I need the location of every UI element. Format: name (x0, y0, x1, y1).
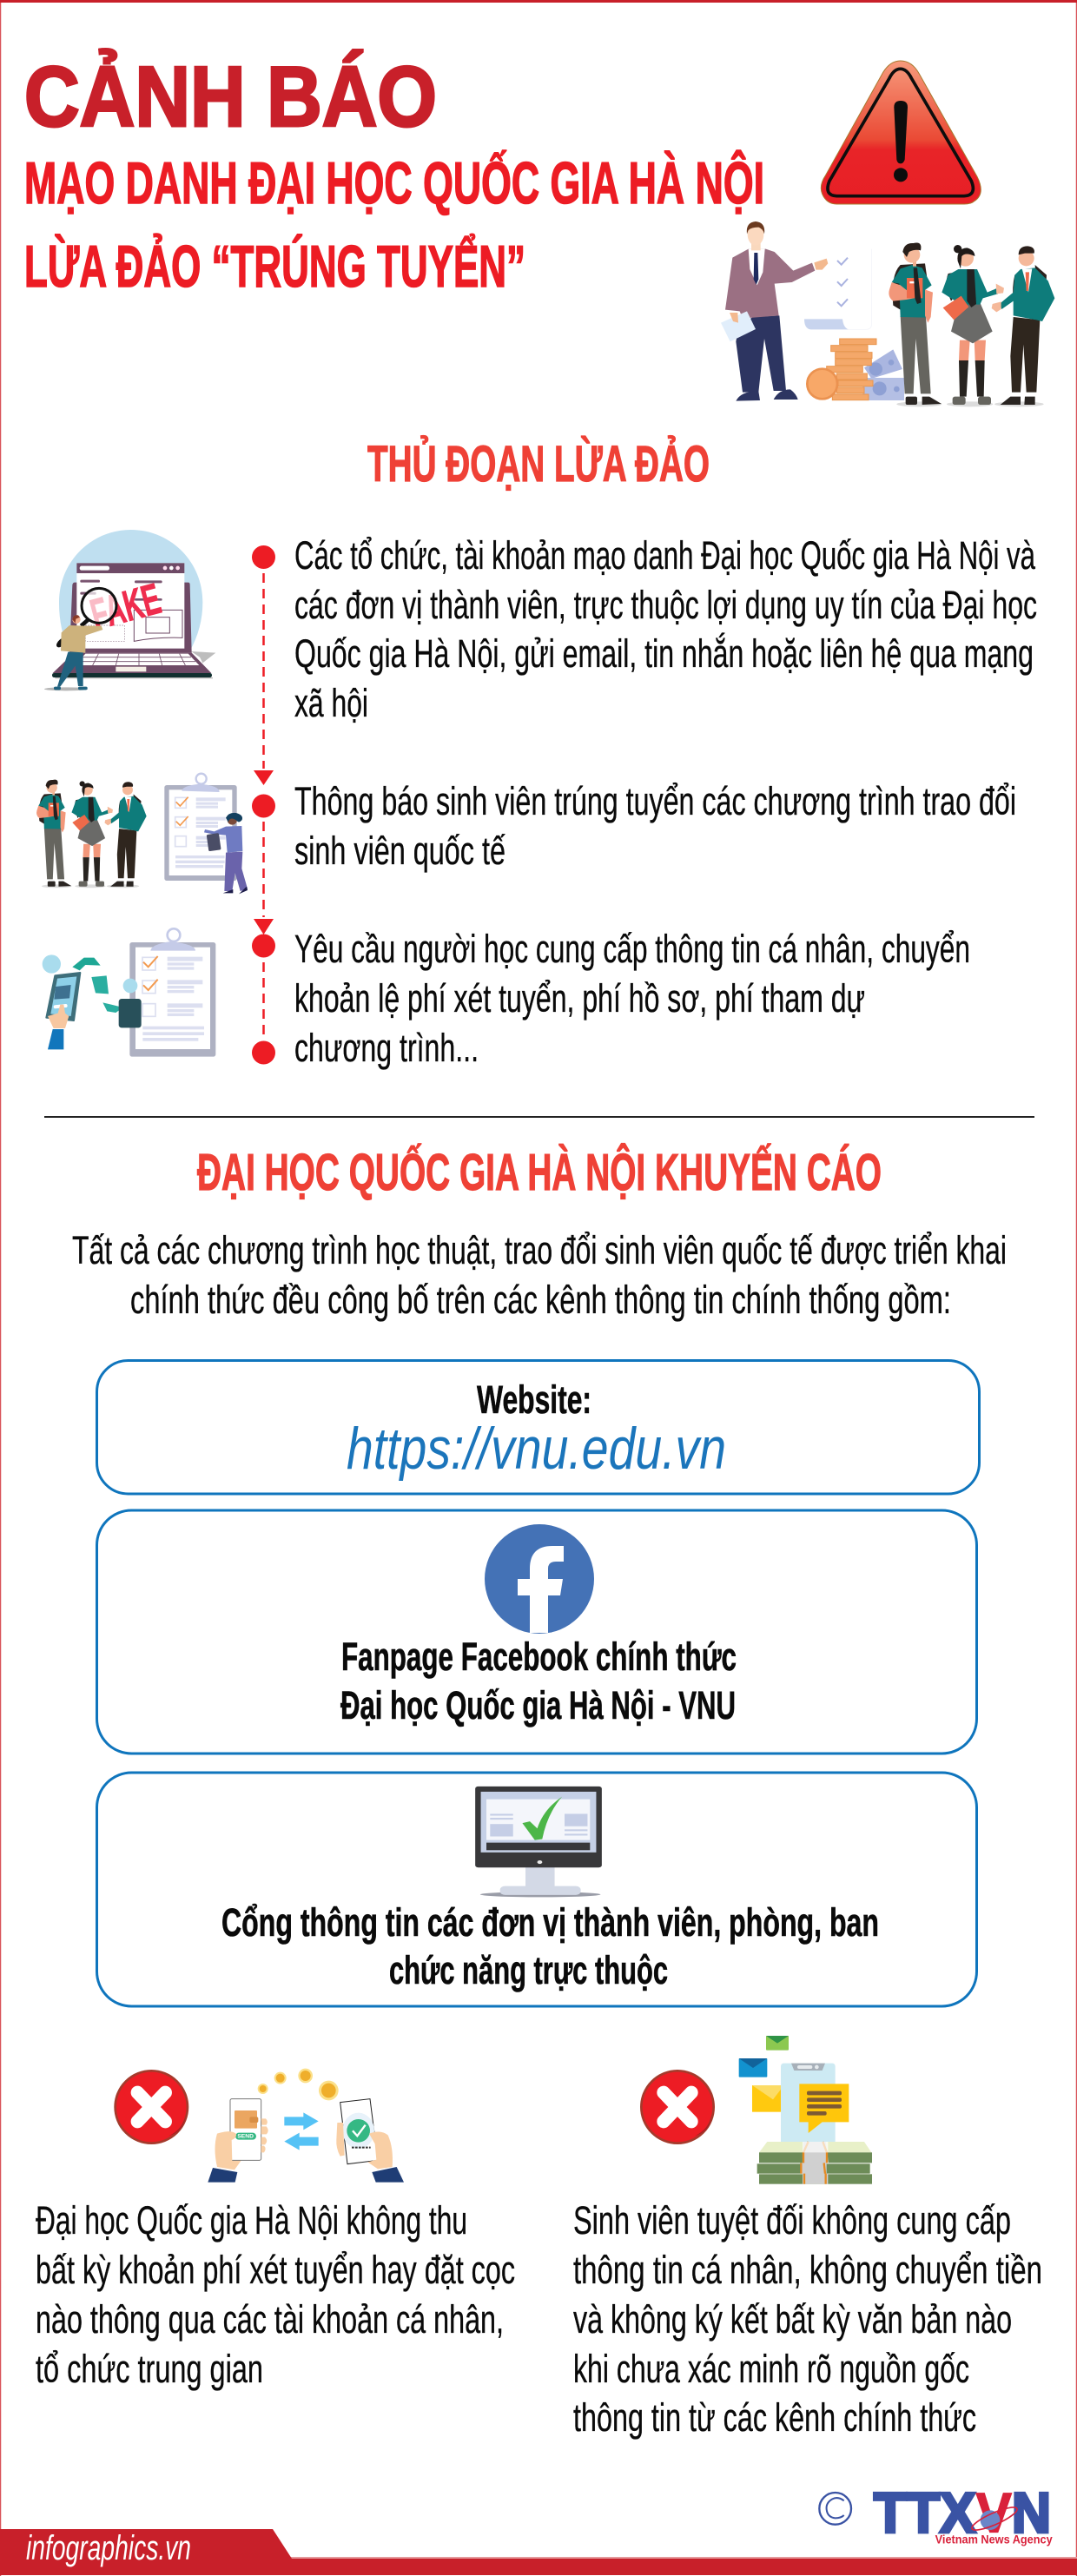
presenter (204, 813, 248, 894)
label: fanpage: Fanpage Facebook chính thức (341, 1635, 737, 1679)
illustration: teacher, checklist, money and students (721, 221, 1054, 406)
tagline: Vietnam News Agency (935, 2533, 1053, 2546)
title (24, 49, 764, 300)
timeline: bullets, dashed connectors, arrows (252, 545, 275, 1065)
link: website URL: https://vnu.edu.vn (347, 1416, 726, 1482)
icon: red cross left (116, 2071, 188, 2143)
illustration: phone payment and clipboard (43, 928, 215, 1057)
text block: trick 3 (294, 927, 970, 1070)
label: fanpage (340, 1635, 737, 1727)
three students (889, 242, 1054, 406)
envelopes (739, 2036, 789, 2112)
top red bar (0, 0, 1077, 3)
text block: left warning (36, 2198, 515, 2391)
text block: trick 1: xã hội (294, 681, 368, 725)
phone (781, 2064, 836, 2147)
chat bubble (799, 2084, 849, 2133)
phone and hand (46, 973, 80, 1049)
text block: left warning: nào thông qua các tài khoản cá nhân, (36, 2297, 504, 2342)
text block: trick 2: sinh viên quốc tế (294, 829, 505, 873)
label: portals (221, 1900, 879, 1992)
label: portals: chức năng trực thuộc (389, 1948, 668, 1992)
teacher (721, 221, 828, 401)
illustration: students (36, 780, 147, 888)
text block: left warning: tổ chức trung gian (36, 2347, 263, 2391)
FAKE stamp text: FAKE (85, 574, 166, 639)
heading: tricks: THỦ ĐOẠN LỪA ĐẢO (367, 436, 710, 492)
illustration: fake website on laptop (44, 530, 215, 690)
icon: red cross right (641, 2071, 714, 2143)
cash stack (757, 2142, 872, 2184)
coins (258, 2069, 339, 2100)
illustration: messages and cash (739, 2036, 872, 2184)
inspector figure (44, 615, 102, 690)
illustration: clipboard with presenter (164, 774, 248, 894)
text block: trick 1 (294, 533, 1037, 725)
footer band (0, 2529, 1077, 2575)
wordmark: TTXVN (874, 2480, 1051, 2544)
send label: SEND (237, 2135, 254, 2140)
panel: website (97, 1360, 980, 1494)
magnifying glass (81, 588, 116, 626)
icon: warning triangle (821, 61, 981, 204)
money stack (807, 339, 904, 400)
globe (969, 2503, 1020, 2534)
text block: left warning: Đại học Quốc gia Hà Nội không thu (36, 2198, 467, 2242)
label: website: Website: (477, 1377, 591, 1422)
panel: unit portals (97, 1773, 976, 2006)
text block: trick 3: khoản lệ phí xét tuyển, phí hồ sơ, phí tham dự (294, 976, 865, 1020)
icon: monitor with check (475, 1787, 602, 1897)
logo: TTXVN (819, 2480, 1053, 2546)
footer site label: infographics.vn (26, 2529, 191, 2567)
title line: warning: CẢNH BÁO (24, 49, 437, 144)
text block: introduction (72, 1228, 1007, 1322)
copyright mark (819, 2493, 851, 2525)
text block: trick 3: chương trình... (294, 1026, 479, 1070)
text block: right warning (573, 2198, 1042, 2440)
transfer arrows (284, 2112, 319, 2150)
checklist paper (804, 249, 871, 329)
text block: trick 2 (294, 779, 1016, 873)
subtitle line 2: LỪA ĐẢO “TRÚNG TUYỂN” (24, 233, 525, 300)
text block: left warning: bất kỳ khoản phí xét tuyển hay đặt cọc (36, 2248, 515, 2292)
illustration: phone money transfer (208, 2069, 404, 2183)
icon: facebook (485, 1524, 594, 1634)
panel: facebook fanpage (97, 1510, 976, 1754)
label: fanpage: Đại học Quốc gia Hà Nội - VNU (340, 1683, 736, 1727)
